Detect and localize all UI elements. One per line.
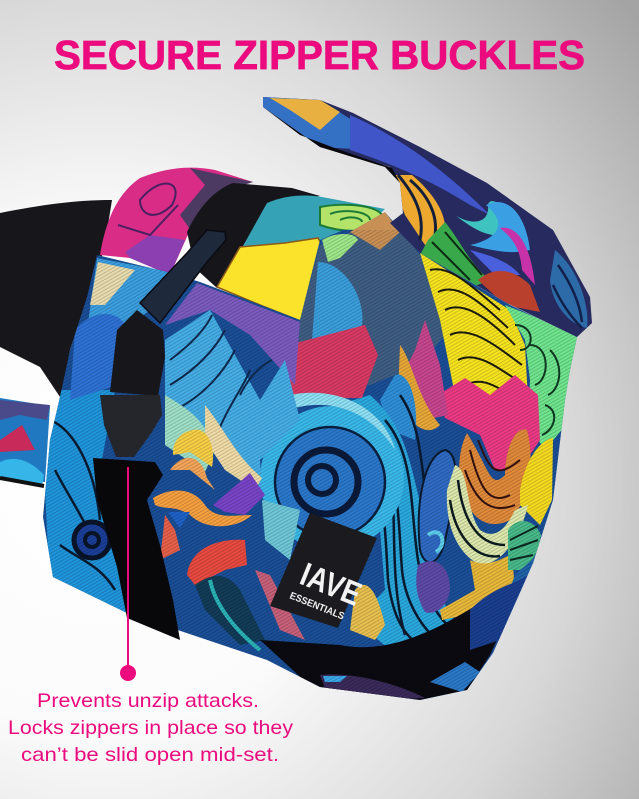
logo subtitle: ESSENTIALS bbox=[288, 591, 346, 623]
caption: Locks zippers in place so they bbox=[8, 717, 293, 739]
left blue side bbox=[45, 390, 126, 612]
blue oval swirl bbox=[419, 450, 456, 562]
cream swirl bbox=[447, 465, 528, 565]
rubber logo badge bbox=[270, 513, 377, 628]
yellow cloud panel bbox=[217, 238, 325, 322]
teal upper panel bbox=[243, 195, 385, 246]
pink spike and orange flames bbox=[409, 320, 448, 418]
right blue shell bbox=[550, 250, 588, 328]
pale blue stripes bbox=[165, 310, 300, 495]
red orange patch bbox=[478, 271, 540, 312]
big blue spiral bbox=[260, 406, 404, 550]
red hatched panel bbox=[288, 325, 378, 398]
flap blue band bbox=[350, 115, 490, 215]
flap end pattern bbox=[263, 97, 350, 149]
pink top panel bbox=[100, 168, 253, 275]
caption bbox=[8, 690, 293, 766]
magenta pink cloud bbox=[438, 375, 540, 470]
orange band bbox=[153, 491, 252, 526]
red shell bbox=[187, 540, 247, 585]
zipper pull bbox=[140, 230, 226, 323]
green stripes bbox=[420, 222, 484, 286]
hatched dark panel bbox=[296, 212, 445, 385]
green shell bbox=[508, 521, 541, 570]
orange lower-right of badge bbox=[350, 585, 385, 640]
teal and blue waves bbox=[455, 201, 525, 236]
purple blot bbox=[416, 561, 450, 613]
orange stripes bbox=[396, 175, 444, 245]
rear patterned strap end bbox=[0, 398, 50, 486]
flap bbox=[260, 95, 600, 340]
plastic buckle bbox=[100, 395, 162, 457]
top-left pocket colours bbox=[88, 258, 168, 323]
rear black waist strap bbox=[0, 200, 112, 400]
pointer dot bbox=[120, 665, 136, 681]
purple shard bbox=[213, 473, 265, 515]
purple pocket band bbox=[165, 283, 300, 385]
lower dark teal stripes bbox=[195, 576, 265, 645]
pointer line bbox=[127, 467, 129, 673]
black zipper tape bbox=[187, 183, 320, 288]
webbing strap bbox=[110, 310, 165, 396]
blue stream waves bbox=[351, 395, 453, 646]
title: SECURE ZIPPER BUCKLES bbox=[54, 32, 585, 78]
print texture bbox=[40, 230, 600, 710]
bottom black hem bbox=[260, 608, 496, 700]
orange swirl bbox=[459, 429, 531, 524]
main printed front panel bbox=[40, 212, 600, 710]
green cloud panel bbox=[505, 305, 580, 450]
yellow dome bbox=[173, 430, 213, 467]
logo wordmark: IAVE bbox=[295, 555, 367, 613]
bright yellow side fold bbox=[520, 438, 553, 525]
caption: can’t be slid open mid-set. bbox=[21, 744, 279, 766]
black flap underside bbox=[263, 107, 400, 183]
caption: Prevents unzip attacks. bbox=[37, 690, 259, 712]
buckle frame and lower black webbing bbox=[93, 458, 180, 640]
yellow scale panel bbox=[420, 253, 528, 395]
